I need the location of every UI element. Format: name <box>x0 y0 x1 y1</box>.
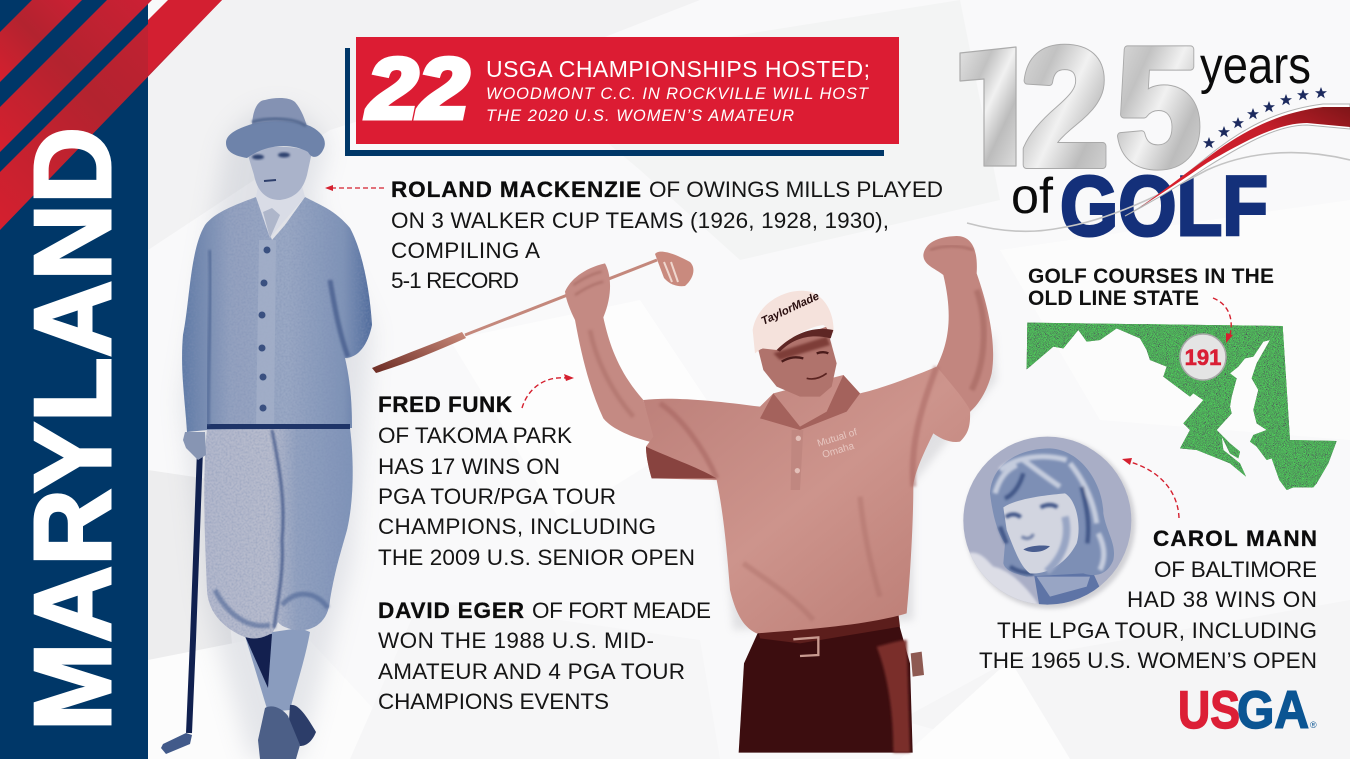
collar and placket <box>760 375 860 430</box>
cloud <box>970 552 1039 604</box>
arrow: Fred Funk <box>522 374 574 408</box>
silver 125: 2 <box>1021 13 1109 201</box>
silver 125 <box>960 13 1201 201</box>
logo: USGA: GA <box>1237 681 1309 740</box>
mouth <box>1023 545 1050 552</box>
text: Fred Funk: THE 2009 U.S. SENIOR OPEN <box>378 545 695 570</box>
text: Fred Funk <box>378 392 695 570</box>
face <box>247 147 312 200</box>
knicker folds <box>272 430 283 628</box>
arrow: Roland Mackenzie <box>325 185 384 191</box>
logo: USGA <box>1178 681 1317 740</box>
hand on club <box>183 432 206 460</box>
text: Carol Mann: CAROL MANN <box>1153 526 1317 551</box>
text: David Eger: CHAMPIONS EVENTS <box>378 689 609 714</box>
word: of: of <box>1011 168 1053 224</box>
sweater placket and buttons <box>207 240 350 429</box>
headline banner: championships hosted <box>345 37 899 156</box>
logo: USGA: US <box>1178 681 1240 740</box>
golf ball with count: 191 <box>1185 345 1221 370</box>
stars <box>1203 87 1327 148</box>
cap <box>753 291 834 353</box>
navy band <box>0 0 148 759</box>
text: Roland Mackenzie <box>391 177 943 293</box>
logo: 125 years of golf <box>960 13 1350 253</box>
arrow: map <box>1213 298 1233 343</box>
text: Roland Mackenzie: ON 3 WALKER CUP TEAMS (1926, 1928, 1930), <box>391 208 889 233</box>
word: GOLF: GOLF <box>1060 159 1268 253</box>
navy offset shape <box>345 48 884 156</box>
knickers <box>204 428 353 638</box>
sweater <box>182 197 372 432</box>
red box <box>356 37 899 144</box>
golf ball with count <box>1180 334 1226 380</box>
map of Maryland <box>1027 323 1337 490</box>
neck and chest <box>1034 573 1100 605</box>
text: Roland Mackenzie: ROLAND MACKENZIE <box>391 177 641 202</box>
text: Roland Mackenzie: COMPILING A <box>391 238 540 263</box>
left band with state name <box>0 0 222 759</box>
photo: Fred Funk <box>372 236 997 753</box>
headline banner: championships hosted: WOODMONT C.C. IN ROCKVILLE WILL HOST <box>486 85 870 103</box>
state name: MARYLAND <box>12 127 134 731</box>
text: David Eger: DAVID EGER <box>378 598 524 623</box>
logo: USGA: ® <box>1310 720 1317 730</box>
right arm and fist <box>923 236 993 413</box>
text: David Eger: WON THE 1988 U.S. MID- <box>378 628 654 653</box>
shirt <box>643 367 970 633</box>
text: Roland Mackenzie: 5-1 RECORD <box>391 268 519 293</box>
face <box>758 327 837 397</box>
soft shadow <box>182 108 372 759</box>
banner text: USGA CHAMPIONSHIPS HOSTED; <box>486 56 870 82</box>
left arm and fist <box>565 263 657 443</box>
belt <box>758 613 900 643</box>
text: Carol Mann: OF BALTIMORE <box>1154 557 1317 582</box>
text: Carol Mann: THE LPGA TOUR, INCLUDING <box>997 618 1317 643</box>
arrow: Carol Mann <box>1122 458 1179 518</box>
swoosh <box>967 104 1350 231</box>
text: Fred Funk: HAS 17 WINS ON <box>378 454 560 479</box>
pants <box>739 618 913 753</box>
shadow <box>965 438 1135 609</box>
text: Fred Funk: CHAMPIONS, INCLUDING <box>378 514 656 539</box>
photo: Carol Mann <box>960 433 1135 610</box>
shadow <box>647 330 997 630</box>
text: Fred Funk: OF TAKOMA PARK <box>378 423 572 448</box>
text: David Eger: OF FORT MEADE <box>532 598 711 623</box>
text: Fred Funk: PGA TOUR/PGA TOUR <box>378 484 616 509</box>
sleeve and fold shading <box>646 447 717 478</box>
text: Carol Mann: THE 1965 U.S. WOMEN’S OPEN <box>979 648 1317 673</box>
big number: 22 <box>365 42 469 137</box>
heading: golf courses: GOLF COURSES IN THE <box>1028 265 1274 288</box>
text: Carol Mann <box>979 526 1317 673</box>
shirt logo: Mutual of <box>816 427 859 450</box>
hair <box>990 448 1114 577</box>
silver 125: 2 <box>1021 13 1109 201</box>
silver 125: 5 <box>1116 13 1201 201</box>
photo: Roland Mackenzie <box>161 98 372 759</box>
headline banner: championships hosted: THE 2020 U.S. WOMEN’S AMATEUR <box>486 107 794 125</box>
face <box>1003 493 1079 573</box>
text: Roland Mackenzie: OF OWINGS MILLS PLAYED <box>649 177 943 202</box>
text: David Eger: AMATEUR AND 4 PGA TOUR <box>378 659 685 684</box>
silver 125: 5 <box>1116 13 1201 201</box>
photo: Fred Funk: Omaha <box>821 441 856 461</box>
sky <box>960 433 1133 607</box>
golf club <box>161 450 200 754</box>
legs and shoes <box>245 628 316 759</box>
hat <box>226 98 325 158</box>
heading: golf courses <box>1028 265 1274 310</box>
putter <box>372 252 693 373</box>
collar and tie <box>256 186 305 238</box>
red diagonal stripes <box>0 0 222 230</box>
heading: golf courses: OLD LINE STATE <box>1028 287 1199 310</box>
text: Fred Funk: FRED FUNK <box>378 392 513 417</box>
text: Carol Mann: HAD 38 WINS ON <box>1127 587 1317 612</box>
word: years: years <box>1200 37 1311 95</box>
text: David Eger <box>378 598 711 714</box>
photo: Fred Funk: TaylorMade <box>760 290 821 328</box>
